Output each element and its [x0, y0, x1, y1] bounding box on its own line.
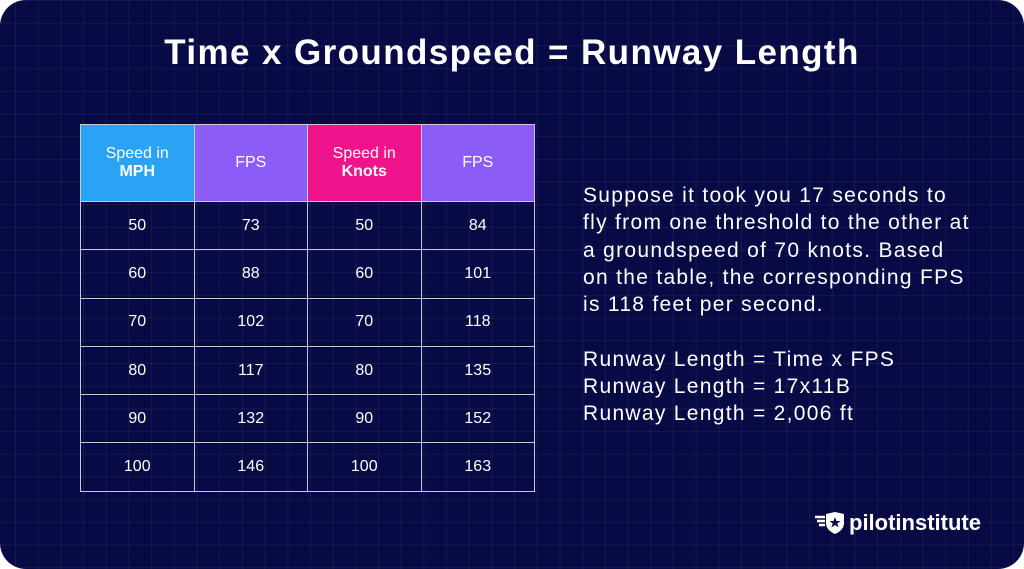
table: speed to FPS: 163 — [464, 458, 491, 475]
explanation text: a groundspeed of 70 knots. Based — [583, 239, 945, 262]
table: speed to FPS: 70 — [128, 313, 146, 330]
table: speed to FPS: 50 — [128, 217, 146, 234]
table: speed to FPS: 84 — [469, 217, 487, 234]
table: speed to FPS: 60 — [128, 265, 146, 282]
table: speed to FPS: 132 — [237, 410, 264, 427]
explanation text: Runway Length = 17x11B — [583, 375, 851, 398]
table: speed to FPS: Speed in — [106, 145, 169, 162]
table: speed to FPS: 88 — [242, 265, 260, 282]
table: speed to FPS: 60 — [355, 265, 373, 282]
logo: pilotinstitute: pilotinstitute — [849, 510, 981, 535]
table: speed to FPS: 152 — [464, 410, 491, 427]
table: speed to FPS: 80 — [355, 362, 373, 379]
table: speed to FPS: FPS — [462, 154, 493, 171]
table: speed to FPS: Speed in — [333, 145, 396, 162]
explanation text: Runway Length = 2,006 ft — [583, 402, 854, 425]
table: speed to FPS: 90 — [128, 410, 146, 427]
explanation text: Suppose it took you 17 seconds to — [583, 184, 947, 207]
table: speed to FPS: 100 — [124, 458, 151, 475]
table: speed to FPS: FPS — [235, 154, 266, 171]
table: speed to FPS: 80 — [128, 362, 146, 379]
table: speed to FPS: MPH — [119, 163, 155, 180]
explanation text — [583, 184, 970, 425]
table: speed to FPS: 146 — [237, 458, 264, 475]
table: speed to FPS: 70 — [355, 313, 373, 330]
explanation text: on the table, the corresponding FPS — [583, 266, 965, 289]
table: speed to FPS: 100 — [351, 458, 378, 475]
explanation text: fly from one threshold to the other at — [583, 211, 970, 234]
table: speed to FPS: 90 — [355, 410, 373, 427]
table: speed to FPS: 118 — [465, 313, 490, 330]
table: speed to FPS: 101 — [464, 265, 491, 282]
table: speed to FPS: 102 — [237, 313, 264, 330]
explanation text: is 118 feet per second. — [583, 293, 824, 316]
table: speed to FPS: 73 — [242, 217, 260, 234]
table: speed to FPS: 135 — [464, 362, 491, 379]
explanation text: Runway Length = Time x FPS — [583, 348, 895, 371]
table: speed to FPS — [80, 124, 535, 492]
table: speed to FPS: 50 — [355, 217, 373, 234]
table: speed to FPS: 117 — [238, 362, 264, 379]
table: speed to FPS: Knots — [342, 163, 387, 180]
title: Time x Groundspeed = Runway Length — [164, 33, 860, 72]
